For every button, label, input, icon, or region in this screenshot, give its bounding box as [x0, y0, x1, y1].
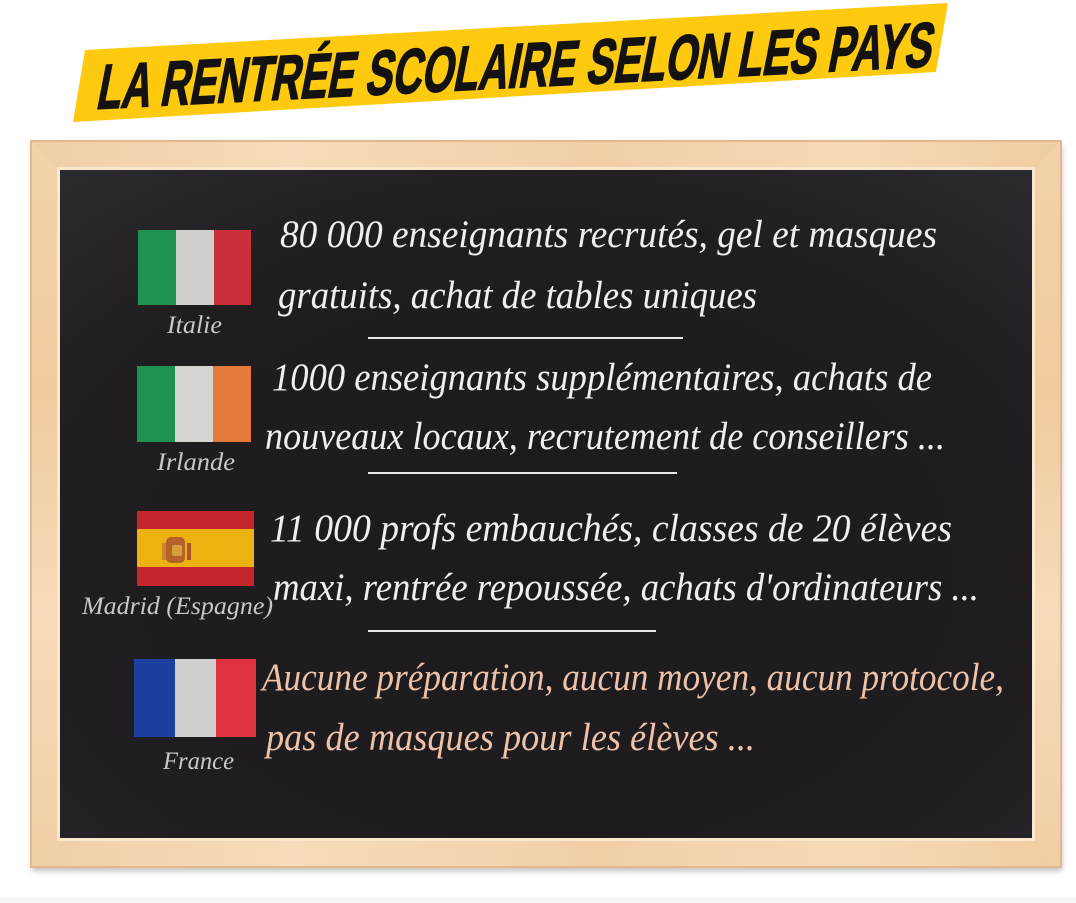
board surface — [60, 170, 1032, 838]
flag: France — [134, 659, 256, 737]
text: France situation — [259, 656, 1004, 759]
row: Italie — [138, 213, 937, 339]
row: Madrid (Espagne) — [81, 507, 979, 620]
text: Irlande measures: nouveaux locaux, recrutement de conseillers ... — [265, 415, 945, 458]
text: Irlande measures: 1000 enseignants supplémentaires, achats de — [272, 356, 932, 399]
row: Irlande — [137, 356, 945, 476]
text: Madrid measures: 11 000 profs embauchés, classes de 20 élèves — [270, 507, 952, 550]
label: Italie: Italie — [166, 312, 222, 339]
text: France situation: Aucune préparation, aucun moyen, aucun protocole, — [259, 656, 1004, 699]
text: France situation: pas de masques pour les élèves ... — [263, 716, 755, 759]
flag: Spain — [137, 511, 254, 586]
flag: Italy — [138, 230, 251, 305]
chalkboard — [30, 140, 1062, 871]
row: France — [134, 656, 1004, 775]
title banner — [73, 3, 948, 123]
wooden frame — [30, 140, 1062, 871]
text: Madrid measures: maxi, rentrée repoussée, achats d'ordinateurs ... — [273, 566, 979, 609]
coat of arms — [162, 537, 191, 563]
text: Italie measures — [278, 213, 937, 317]
text: Italie measures: gratuits, achat de tables uniques — [278, 274, 757, 317]
label: France: France — [162, 748, 234, 775]
text: Italie measures: 80 000 enseignants recrutés, gel et masques — [280, 213, 937, 256]
label: Madrid (Espagne): Madrid (Espagne) — [81, 593, 273, 620]
text: Madrid measures — [270, 507, 979, 609]
label: Irlande: Irlande — [156, 449, 235, 476]
flag: Ireland — [137, 366, 251, 442]
text: Irlande measures — [265, 356, 945, 458]
